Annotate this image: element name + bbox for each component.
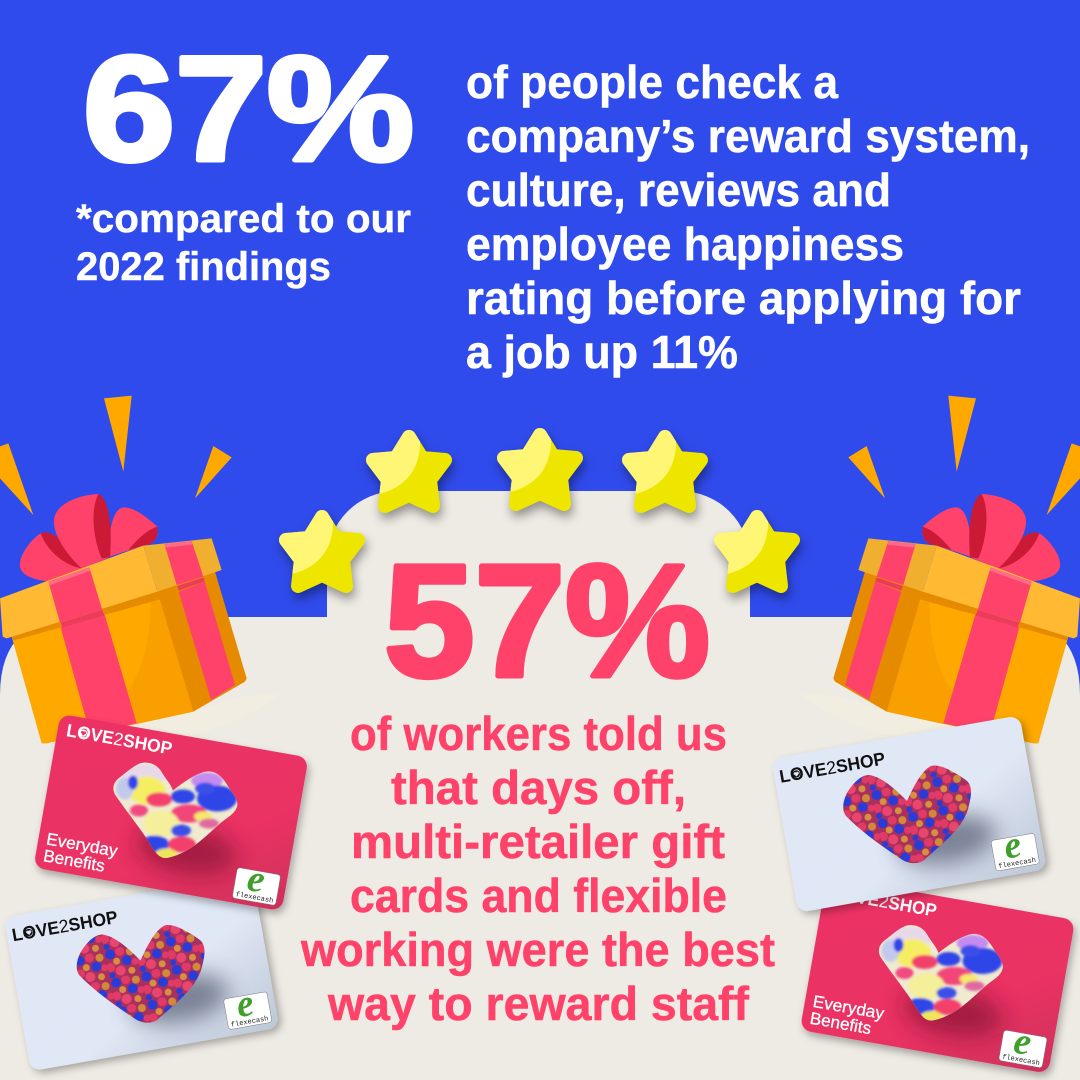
text block: 67% description: of people check a [466, 56, 838, 108]
icon: right gift box [802, 494, 1080, 747]
panel: beige lower panel [0, 491, 1080, 1080]
text block: 57% description: working were the best [300, 923, 775, 976]
stat: 67%: 67% [83, 25, 414, 192]
gift card: right pink: Benefits [808, 1009, 873, 1038]
rating stars [262, 408, 793, 586]
gift card: left pink: LOVE2SHOP [65, 720, 174, 759]
text block: 57% description: cards and flexible [350, 869, 727, 922]
text block: 67% description: company’s reward system, [466, 110, 1030, 162]
gift card: right pink: Everyday [811, 992, 886, 1023]
gift card: right light [771, 715, 1047, 913]
icon: right sparks [848, 396, 1080, 515]
gift card: left pink: flexecash [235, 891, 274, 906]
text block: 57% description: that days off, [391, 761, 686, 814]
gift card: left light: flexecash [230, 1015, 269, 1030]
text block: 57% description: way to reward staff [327, 977, 749, 1030]
gift card: right light: flexecash [998, 857, 1037, 871]
gift card: left pink: e [244, 857, 268, 901]
gift card: left pink: Benefits [42, 846, 106, 876]
note: compared to 2022 findings: *compared to our [76, 197, 411, 241]
gift card: left light: LOVE2SHOP [10, 907, 119, 945]
gift card: left pink [33, 714, 309, 911]
note: compared to 2022 findings [76, 197, 411, 289]
text block: 67% description: culture, reviews and [466, 164, 891, 216]
gift card: right light: e [1001, 823, 1025, 868]
text block: 67% description [466, 56, 1030, 378]
text block: 67% description: employee happiness [466, 218, 904, 270]
text block: 67% description: rating before applying for [466, 272, 1021, 324]
gift card: right pink: LOVE2SHOP [831, 883, 938, 921]
gift card: left pink: Everyday [45, 829, 120, 861]
text block: 67% description: a job up 11% [466, 326, 738, 378]
icon: left gift box [0, 494, 278, 747]
icon: star 2 [349, 410, 445, 506]
gift card: right light: LOVE2SHOP [778, 748, 887, 787]
gift card: right pink: flexecash [1001, 1054, 1040, 1068]
gift card: right pink [800, 876, 1075, 1074]
icon: star 3 [480, 408, 576, 504]
note: compared to 2022 findings: 2022 findings [76, 245, 331, 289]
stat: 57%: 57% [384, 531, 710, 710]
icon: star 1 [262, 490, 358, 586]
text block: 57% description: of workers told us [350, 707, 727, 760]
icon: star 5 [697, 490, 793, 586]
icon: star 4 [605, 410, 701, 506]
text block: 57% description [300, 707, 775, 1030]
icon: left sparks [0, 396, 232, 515]
gift card: left light [4, 874, 279, 1071]
text block: 57% description: multi-retailer gift [351, 815, 725, 868]
gift card: left light: e [233, 982, 257, 1026]
gift card: right pink: e [1011, 1020, 1035, 1064]
